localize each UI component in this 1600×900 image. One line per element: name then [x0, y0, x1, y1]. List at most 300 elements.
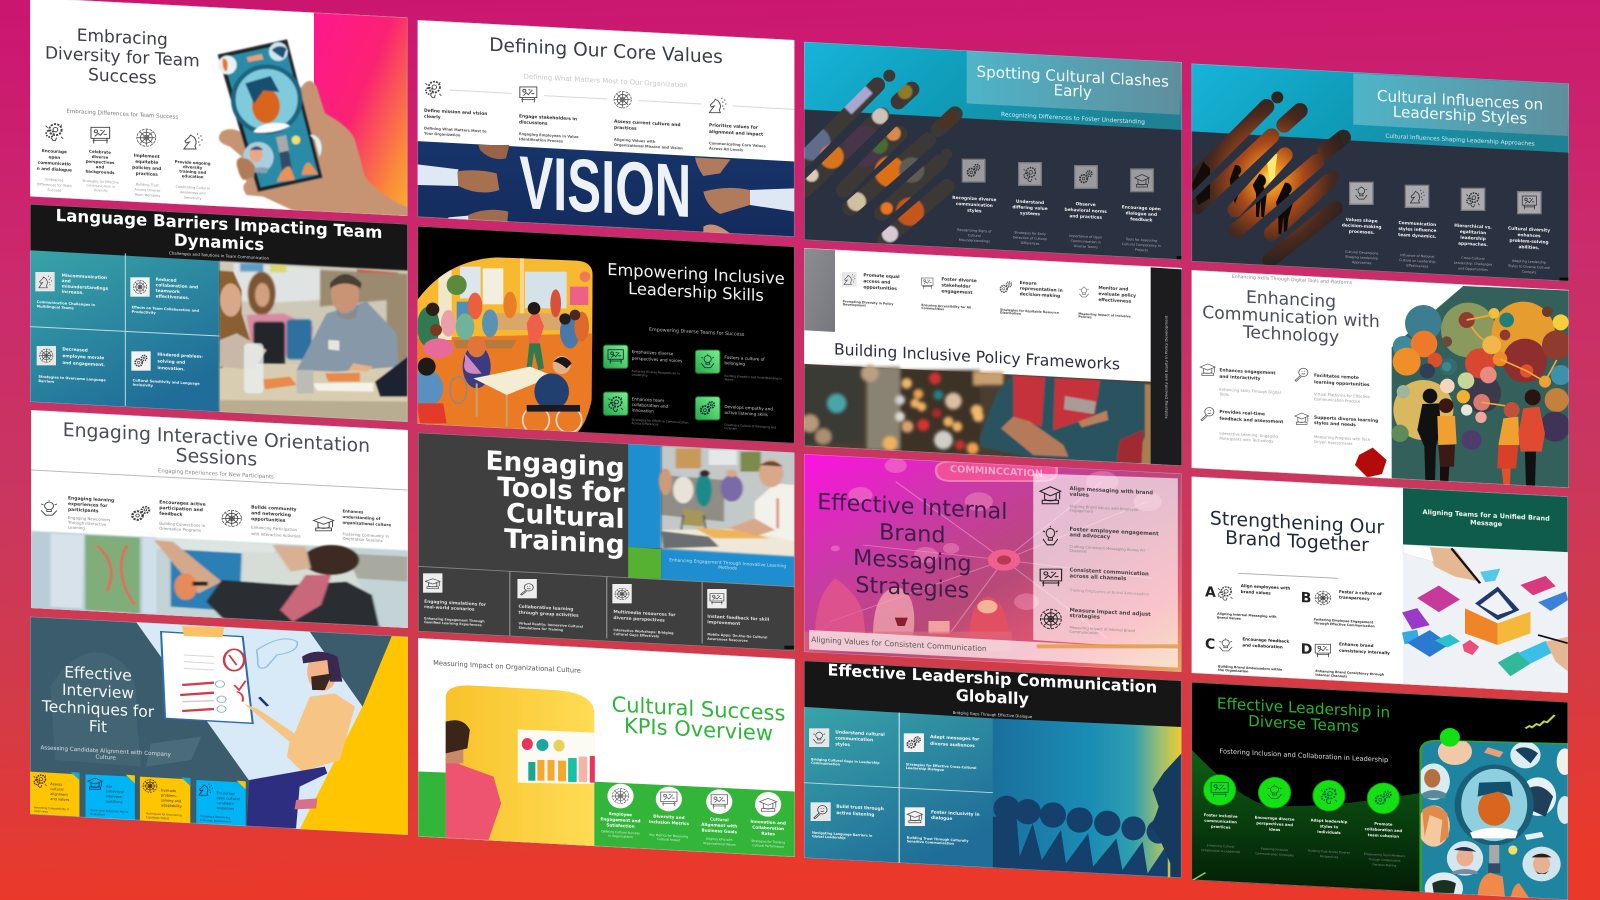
item: engagement — [1200, 364, 1281, 400]
item: hindered problem-solving: innovation. — [157, 365, 185, 373]
item: cultural diversity: enhances — [1517, 232, 1541, 239]
item: monitor policy: Measuring Impact of Inclusive — [1078, 312, 1131, 318]
item: collaborative learning — [517, 579, 583, 633]
item: cultural diversity: Contexts — [1522, 270, 1537, 274]
item: hierarchical approaches: Cross-Cultural — [1461, 256, 1485, 261]
item: simulations: Gamified Learning Experiences — [424, 620, 482, 627]
item: ensure representation: Ensure — [1020, 280, 1037, 287]
KPI: innovation rates: Cultural Performance — [752, 843, 784, 849]
item: foster stakeholder engagement — [921, 276, 977, 313]
item: cultural styles: Communication — [811, 761, 841, 766]
item: engagement: Enhances engagement — [1219, 367, 1275, 376]
item: assess culture: Organizational Mission and Vision — [614, 143, 683, 151]
item: active participation: Encourages active — [159, 499, 206, 508]
item: align messaging — [1040, 486, 1153, 516]
item D: brand consistency: Internal Channels — [1315, 673, 1347, 678]
item B: culture of transparency — [1301, 589, 1382, 628]
item: encourage communication: Embracing — [45, 178, 63, 182]
item: cultural diversity: Styles to Diverse Cultural — [1508, 264, 1550, 270]
item: team cohesion: Through Collaborative — [1367, 857, 1401, 863]
item: encourage communication: open — [48, 154, 60, 160]
item: measure impact — [1040, 608, 1151, 637]
item: measure impact: Measuring Impact of Internal Brand — [1070, 626, 1135, 633]
item: foster stakeholder engagement: Ensuring Accessibility for All — [921, 303, 971, 310]
card: evaluate problem-solving — [140, 777, 190, 824]
slide card: Spotting Cultural Clashes Early — [804, 42, 1182, 260]
item: implement policies: Team Members — [133, 193, 160, 198]
title: Engaging Interactive Orientation — [63, 420, 370, 457]
image: people under idea bubbles — [1391, 286, 1572, 490]
item: diverse learning: Supports diverse learning — [1314, 415, 1378, 424]
item: align messaging: Engagement — [1070, 509, 1094, 514]
item: decreased morale: Barriers — [38, 379, 54, 384]
item: observe norms: Importance of Open — [1069, 234, 1102, 240]
slide card: Embracing Diversity for Team Success — [30, 0, 408, 216]
item: learning experiences — [41, 495, 114, 532]
image: worker and bokeh lights — [800, 364, 1153, 470]
item: diverse perspectives: Communication Strategies — [1255, 851, 1294, 857]
panel heading: Message — [1470, 518, 1503, 528]
item: recognize styles: communication — [956, 201, 993, 209]
item: recognize styles — [952, 159, 996, 244]
item: team collaboration: innovation — [632, 408, 654, 414]
item: hierarchical approaches: egalitarian — [1460, 229, 1486, 236]
title: Cultural — [506, 498, 625, 535]
image: interviewer illustration — [20, 610, 418, 843]
item: monitor policy: evaluate policy — [1098, 291, 1136, 299]
item B: culture of transparency: transparency — [1339, 595, 1370, 601]
item: encourage dialogue — [1122, 169, 1161, 253]
slide card: Cultural Success KPIs Overview — [410, 630, 805, 870]
item: differing values — [1012, 163, 1048, 246]
item: miscommunication: misunderstandings — [62, 283, 109, 292]
item: team cohesion: Promote — [1374, 821, 1393, 827]
item: recognize styles: styles — [967, 208, 982, 214]
item B: culture of transparency: Fostering Employee Engagement — [1314, 617, 1374, 624]
title: Building Inclusive Policy Frameworks — [834, 340, 1120, 374]
item: instant feedback — [707, 589, 770, 644]
title: Sessions — [176, 445, 257, 471]
item: differing values: systems — [1020, 210, 1040, 217]
item: learning experiences: Through Interactive — [67, 520, 107, 527]
item: empathy and listening: active listening skills — [724, 410, 768, 417]
item: miscommunication: Communication Challenges in — [37, 300, 96, 307]
dark side strip — [1151, 267, 1182, 467]
item: assess culture: Aligning Values with — [614, 138, 656, 144]
blue and green colour blocks — [628, 444, 801, 588]
card: encourage responses — [196, 780, 246, 827]
title: Effective — [64, 663, 132, 685]
subtitle: Defining What Matters Most to Our Organization — [524, 73, 688, 89]
item: adapt leadership: Building Trust Across Diverse — [1308, 849, 1350, 855]
image: pink network illustration — [800, 452, 1188, 678]
item: diverse learning: Measuring Progress with Tech- — [1314, 434, 1372, 442]
item: reduced collaboration — [130, 277, 199, 317]
item: multimedia resources: Interactive Workshops: Bridging — [613, 628, 674, 635]
item: values shape decisions: Approaches — [1352, 260, 1372, 265]
item: define mission: Your Organization — [423, 131, 461, 137]
title: Defining Our Core Values — [489, 35, 723, 68]
item: foster inclusivity: Foster inclusivity in — [931, 809, 980, 818]
item: adapt leadership: styles to — [1320, 823, 1339, 829]
item C: feedback and collaboration: the Organization — [1218, 668, 1249, 674]
item: miscommunication: and — [62, 278, 71, 285]
item: community: Builds community — [251, 504, 297, 513]
item C: feedback and collaboration — [1205, 636, 1289, 675]
KPI: employee engagement: Defining Cultural Success — [601, 829, 640, 835]
item: define mission — [423, 82, 487, 139]
item: adapt leadership: Perspectives — [1320, 854, 1339, 859]
subtitle: Cultural Influences Shaping Leadership Approaches — [1385, 134, 1535, 148]
item: foster inclusivity: dialogue — [931, 815, 952, 822]
item C: feedback and collaboration: and collaboration — [1242, 642, 1283, 649]
card: assess alignment: Interviews — [34, 809, 49, 814]
KPI: business alignment: Aligning KPIs with — [706, 837, 733, 842]
title: Effective Leadership Communication — [828, 660, 1157, 697]
card: behavioral questions: Evaluation — [91, 812, 105, 817]
item: employee engagement — [1043, 526, 1159, 557]
item: adapt messages: Leadership Dialogue — [906, 766, 945, 772]
title: Training — [504, 523, 625, 561]
item: reduced collaboration: collaboration and — [156, 282, 198, 291]
item: engage stakeholders: Identification Process — [519, 137, 563, 144]
item: adapt messages: diverse audiences — [930, 741, 975, 749]
item: foster inclusivity — [905, 807, 980, 847]
item: values shape decisions: Shaping Leadership — [1345, 255, 1378, 261]
item: communication styles: Culture on Leadership — [1399, 258, 1435, 264]
item: active participation: Orientation Programs — [159, 526, 201, 533]
item B: culture of transparency: B — [1301, 590, 1311, 607]
item: communication styles — [1398, 185, 1437, 269]
item: inclusive communication: practices — [1211, 824, 1231, 830]
item: decreased morale — [37, 346, 106, 387]
item: implement policies: Building Trust — [136, 182, 160, 188]
item: prioritize values: Prioritize values for — [709, 122, 759, 131]
item: encourage communication: n and dialogue — [37, 166, 72, 173]
card: evaluate problem-solving: adaptability — [161, 803, 182, 808]
translucent items panel — [1033, 473, 1178, 650]
item: align messaging: Align messaging with brand — [1070, 486, 1153, 496]
item: diverse perspectives: ideas — [1269, 827, 1281, 832]
title: Strengthening Our — [1210, 508, 1384, 539]
KPI: business alignment: Cultural — [710, 817, 729, 823]
item: real-time feedback — [1201, 408, 1283, 444]
item: values shape decisions: processes. — [1349, 229, 1375, 236]
item: hierarchical approaches: Leadership: Challenges — [1454, 261, 1493, 267]
title: Leadership Skills — [628, 279, 764, 305]
card: assess alignment: and values — [50, 797, 69, 802]
item: foster stakeholder engagement: engagement — [941, 288, 972, 296]
item: measure impact: strategies — [1070, 613, 1100, 621]
item: culture of belonging — [695, 350, 782, 384]
image: presenter at map screen — [20, 530, 418, 635]
item: assess culture: Assess current culture and — [614, 119, 680, 128]
image: team workshop photo — [659, 446, 798, 557]
item: active participation: participation and — [159, 505, 203, 513]
item: communication styles: Communication — [1399, 220, 1436, 228]
item: organizational culture — [313, 508, 391, 543]
item: recognize styles: Recognize diverse — [952, 195, 996, 203]
item: simulations: real-world scenarios — [424, 604, 475, 613]
item: hindered problem-solving: Cultural Sensitivity and Language — [133, 378, 200, 386]
item: team cohesion: team cohesion — [1368, 832, 1399, 839]
item: organizational culture: understanding of — [342, 514, 381, 521]
item: encourage communication: Differences for Team — [37, 182, 73, 188]
item: hierarchical approaches: leadership — [1460, 235, 1486, 242]
title: Tools for — [497, 472, 625, 509]
item: foster stakeholder engagement: Foster diverse — [941, 276, 977, 284]
item: empathy and listening — [695, 397, 776, 433]
item: cultural styles: communication — [835, 735, 873, 743]
item: employee engagement: and advocacy — [1070, 532, 1111, 540]
item: communication styles: styles influence — [1398, 226, 1436, 234]
KPI: employee engagement: Employee — [609, 811, 632, 817]
title: Cultural Influences on — [1377, 87, 1543, 114]
subtitle: Empowering Diverse Teams for Success — [649, 327, 745, 338]
item: observe norms: Communication in — [1071, 239, 1101, 244]
subtitle: Recognizing Differences to Foster Understanding — [1001, 112, 1145, 126]
title: Technology — [1242, 323, 1339, 348]
item: measure impact: Measure impact and adjust — [1070, 608, 1151, 618]
item: learning experiences: Engaging learning — [68, 495, 114, 504]
item: cultural diversity: problem-solving — [1509, 238, 1549, 246]
item: observe norms: behavioral norms — [1065, 207, 1107, 215]
title: Fit — [89, 717, 107, 736]
item: ensure representation: Distribution — [1000, 311, 1021, 316]
item: ensure representation: Strategies for Equitable Resource — [1000, 308, 1059, 315]
item C: feedback and collaboration: Building Brand Ambassadors within — [1218, 664, 1283, 672]
item: community: and networking — [251, 510, 291, 518]
item: observe norms: Diverse Teams — [1074, 244, 1098, 249]
subtitle: Bridging Gaps Through Effective Dialogue — [953, 710, 1033, 719]
item: organizational culture: Enhances — [342, 508, 364, 514]
item: diverse learning: styles and needs — [1314, 420, 1356, 428]
item: align messaging: values — [1070, 492, 1089, 499]
item: hierarchical approaches: Hierarchical vs. — [1454, 223, 1492, 231]
item: team cohesion: Empowering Team Members — [1364, 852, 1405, 858]
item: organizational culture: Fostering Community in — [342, 531, 390, 539]
item: provide training: education — [182, 173, 204, 179]
KPI: innovation rates: Innovation and — [750, 819, 786, 826]
subtitle: Enhancing Engagement Through Innovative Learning — [669, 557, 786, 569]
green wave background — [1192, 750, 1422, 895]
title: Language Barriers Impacting Team — [56, 206, 382, 242]
item: team collaboration — [603, 392, 689, 428]
item: promote equal access: Development — [843, 302, 866, 308]
item: prioritize values: Across All Levels — [709, 147, 743, 152]
item: build trust: Navigating Language Barriers in — [812, 831, 873, 838]
item: promote equal access: access and — [863, 278, 890, 286]
KPI: innovation rates: Collaboration — [752, 825, 784, 831]
item: inclusive communication: Foster inclusive — [1204, 812, 1238, 819]
item A: align employees — [1205, 583, 1290, 623]
item: recognize styles: Misunderstandings — [959, 238, 990, 244]
subtitle: Embracing Differences for Team Success — [66, 109, 178, 121]
item: implement policies: Implement — [134, 153, 160, 160]
item: provide training: Sensitivity — [184, 196, 201, 201]
item A: align employees: Brand Values — [1217, 615, 1241, 621]
item: define mission: Defining What Matters Most to — [424, 126, 487, 134]
item: build trust: Global Leadership — [812, 834, 846, 840]
item: diverse perspectives: Fostering Inclusive — [1261, 847, 1288, 852]
item: multimedia resources: Multimedia resources for — [613, 609, 676, 618]
item: encourage communication: Success — [48, 188, 61, 193]
item: observe norms: Observe — [1076, 201, 1096, 208]
item B: culture of transparency: Through Effective Communication — [1314, 621, 1375, 628]
image: meeting photo — [219, 261, 410, 427]
green KPI band — [594, 782, 798, 863]
item: reduced collaboration: Reduced — [156, 277, 177, 284]
KPI: employee engagement: Engagement and — [601, 816, 640, 823]
title: Early — [1054, 81, 1092, 101]
slide card: Effective Leadership in Diverse Teams — [1190, 675, 1580, 900]
item: monitor policy: effectiveness — [1098, 297, 1132, 305]
item: celebrate perspectives: diverse — [92, 154, 109, 160]
item: foster stakeholder engagement: Communities — [921, 306, 944, 311]
item: decreased morale: employee morale — [62, 353, 104, 361]
item: real-time feedback: Participants with Technology — [1219, 436, 1274, 444]
KPI: employee engagement: Satisfaction — [606, 822, 635, 829]
item: diverse perspectives: Encourage diverse — [1255, 815, 1295, 822]
item: encourage communication: communicatio — [38, 160, 71, 167]
card: evaluate problem-solving: Techniques for Uncovering — [145, 811, 182, 817]
item: differing values: Detection of Cultural — [1013, 235, 1047, 241]
item: recognize styles: Cultural — [968, 233, 981, 238]
card: assess alignment: alignment — [50, 792, 69, 797]
item: collaborative learning: Collaborative learning — [518, 604, 573, 613]
item: remote learning: Facilitates remote — [1314, 373, 1359, 381]
item: define mission: Define mission and vision — [424, 108, 487, 117]
subtitle: Fostering Inclusion and Collaboration in Leadership — [1219, 747, 1388, 764]
item: differing values: Understand — [1016, 199, 1044, 206]
card: assess alignment — [30, 772, 79, 817]
title: Diversity for Team — [45, 43, 200, 72]
gradient side panel — [314, 12, 408, 216]
item: instant feedback: Instant feedback for skill — [707, 614, 770, 623]
item D: brand consistency: Enhance brand — [1339, 641, 1374, 648]
item: remote learning: Communication Practice — [1314, 396, 1361, 404]
item: hindered problem-solving: solving and — [157, 358, 185, 366]
item: hierarchical approaches — [1454, 188, 1493, 272]
item: real-time feedback: feedback and assessment — [1219, 416, 1283, 425]
item: build trust: active listening — [836, 810, 874, 818]
item: active participation: Building Connections in — [159, 521, 206, 528]
item: provide training: Celebrating Cultural — [176, 185, 210, 191]
item: remote learning: Virtual Platforms for Effective — [1314, 391, 1370, 399]
title: Leadership Styles — [1393, 103, 1527, 128]
item: inclusive communication: Collaboration & Leadership — [1201, 848, 1240, 854]
title: KPIs Overview — [624, 713, 773, 746]
card: assess alignment: cultural — [50, 787, 64, 792]
item: diverse perspectives — [603, 345, 682, 379]
item: miscommunication: Miscommunication — [62, 273, 107, 281]
card: evaluate problem-solving: problem- — [161, 793, 178, 798]
item: team cohesion — [1364, 783, 1405, 868]
KPI: employee engagement: in Organizations — [608, 834, 633, 839]
title: Brand Together — [1225, 528, 1369, 556]
item: culture of belonging: Building Empathy and Understanding in — [724, 374, 782, 381]
item: engage stakeholders: Engage stakeholders in — [519, 113, 577, 122]
slide card: Cultural Influences on Leadership Styles — [1192, 64, 1569, 282]
item: diverse perspectives — [1255, 777, 1295, 857]
item: assess culture: practices — [614, 125, 637, 132]
KPI: innovation rates: Strategies for Tracking — [751, 839, 785, 845]
item: celebrate perspectives: and — [96, 164, 104, 170]
item: celebrate perspectives: Celebrate — [89, 149, 111, 155]
item: encourage communication — [37, 124, 73, 193]
item: diverse learning — [1295, 413, 1378, 447]
KPI: diversity metrics: Inclusion Metrics — [649, 819, 689, 826]
item: real-time feedback: Interactive Learning: Engaging — [1219, 431, 1278, 439]
item: consistent communication: Training Employees as Brand Ambassadors — [1069, 588, 1149, 597]
title: Messaging — [853, 545, 972, 577]
slide card: Engaging Interactive Orientation Sessions — [20, 405, 420, 645]
item: community: with Interactive Activities — [251, 531, 301, 539]
item: employee engagement: Crafting Consistent Messaging Across All — [1070, 545, 1145, 553]
item: reduced collaboration: effectiveness. — [156, 293, 190, 301]
item: cultural styles: Understand cultural — [835, 729, 885, 738]
item: communication styles: team dynamics. — [1398, 232, 1437, 240]
teal items panel — [800, 707, 993, 870]
panel heading: Aligning Teams for a Unified Brand — [1423, 508, 1550, 523]
item: promote equal access: Promote equal — [863, 272, 900, 280]
item D: brand consistency: Enhancing Brand Consistency through — [1315, 669, 1385, 677]
title: Spotting Cultural Clashes — [976, 63, 1169, 91]
card: evaluate problem-solving: solving and — [161, 798, 181, 803]
item: culture of belonging: Teams — [723, 377, 734, 382]
item: monitor policy: Policies — [1078, 315, 1092, 319]
item: provide training: diversity — [183, 164, 203, 170]
item: ensure representation: representation in — [1020, 286, 1063, 294]
slide card: Language Barriers Impacting Team Dynamics — [30, 204, 408, 422]
title: Effective Leadership in — [1217, 694, 1390, 722]
item: cultural diversity: Adapting Leadership — [1512, 259, 1546, 265]
image: striped team photo — [804, 70, 963, 245]
item: celebrate perspectives: Diversity — [94, 188, 108, 193]
item: hierarchical approaches: and Opportunities — [1458, 266, 1488, 272]
item: culture of belonging: belonging — [724, 360, 745, 366]
item: celebrate perspectives: Strategies for Effective — [82, 179, 119, 185]
item: empathy and listening: Inclusion — [724, 426, 737, 431]
title: Effective Internal — [817, 489, 1007, 525]
item: celebrate perspectives — [82, 127, 119, 193]
item: consistent communication: across all channels — [1070, 573, 1126, 582]
KPI: innovation rates: Rates — [761, 831, 775, 836]
item: miscommunication: Multilingual Teams — [37, 304, 74, 310]
item B: culture of transparency: Foster a culture of — [1339, 589, 1382, 596]
subtitle: Culture — [95, 755, 116, 762]
item: promote equal access: Promoting Diversity in Policy — [843, 299, 893, 306]
card: assess alignment: Assess — [50, 782, 62, 787]
item: hindered problem-solving: Inclusivity — [133, 383, 154, 388]
item: reduced collaboration: Productivity — [132, 310, 156, 315]
item: diverse learning: Driven Assessments — [1314, 439, 1352, 446]
item: hierarchical approaches: approaches. — [1458, 241, 1488, 248]
item: decreased morale: Decreased — [62, 346, 88, 354]
item: align messaging: Aligning Brand Values with Employee — [1070, 504, 1139, 512]
title: Dynamics — [174, 231, 264, 254]
item: encourage dialogue: Cultural Competency in — [1122, 242, 1161, 248]
KPI: business alignment — [701, 789, 737, 847]
item A: align employees: A — [1205, 584, 1216, 601]
slide card: Defining Our Core Values — [418, 20, 794, 237]
item: employee engagement: Channels — [1070, 549, 1087, 554]
item: instant feedback: Awareness Resources — [707, 637, 748, 643]
item: engagement: Tools — [1218, 391, 1229, 397]
item: communication styles: Effectiveness — [1406, 263, 1429, 269]
image: silhouetted audience and sunrise — [993, 718, 1188, 883]
item: collaborative learning: Simulations for Training — [518, 626, 564, 632]
